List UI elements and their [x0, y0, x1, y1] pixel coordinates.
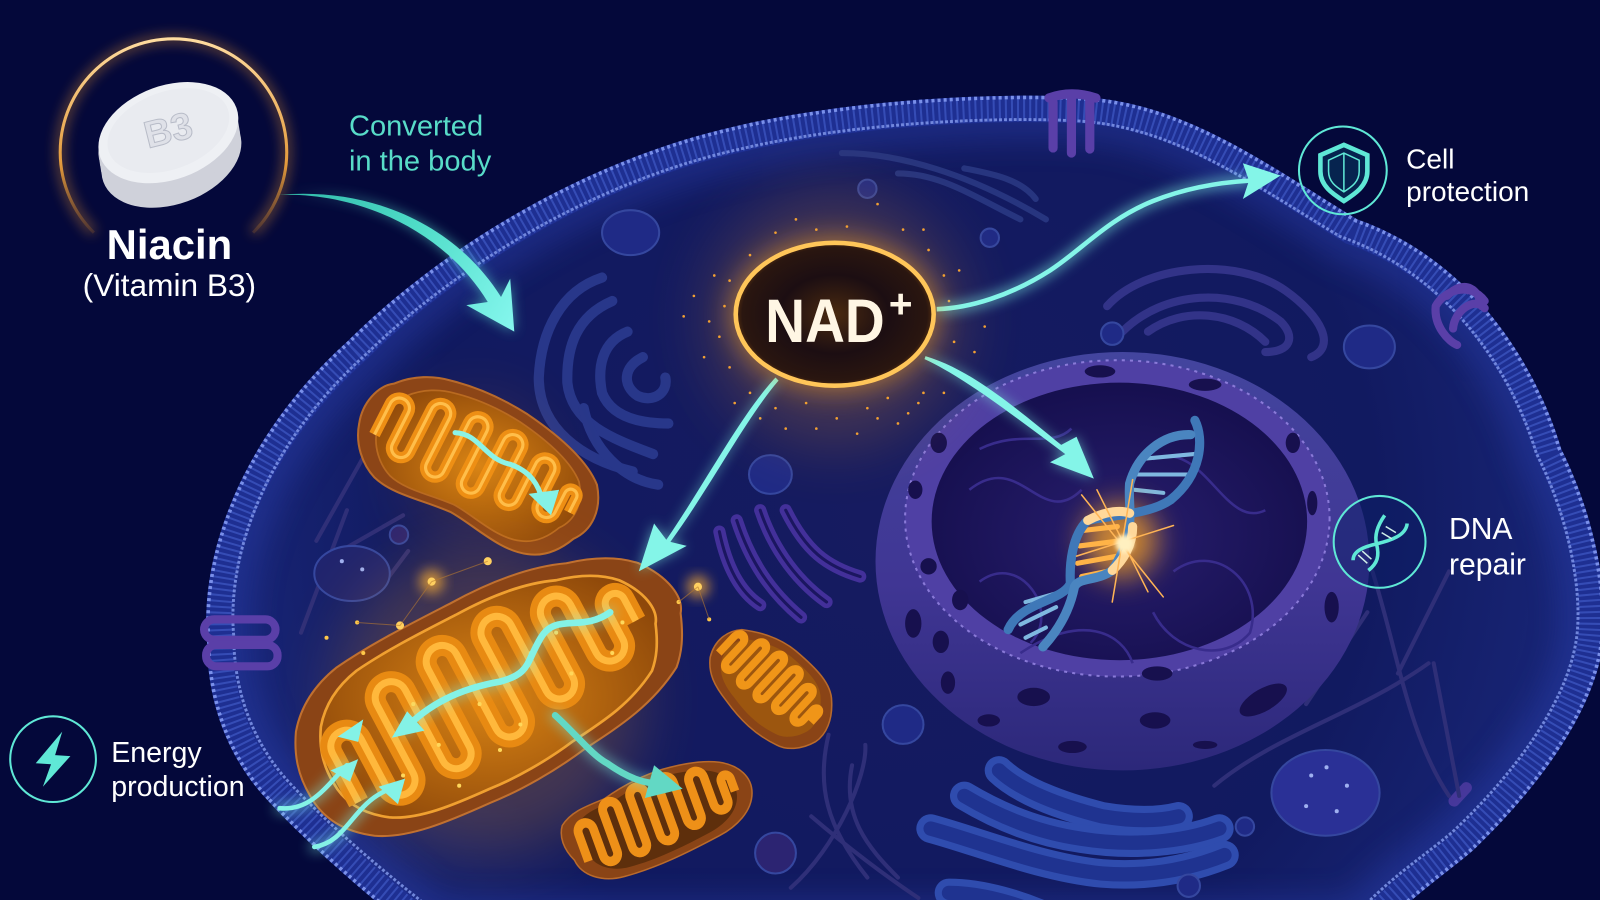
icon: cell protection shield [1299, 127, 1387, 214]
converted label: Converted [349, 111, 483, 143]
NAD+ superscript: + [889, 280, 913, 326]
B3 tablet [84, 64, 256, 226]
icon: DNA repair [1334, 496, 1426, 588]
glowing ring [60, 39, 287, 233]
arrow: NAD+ to DNA [924, 356, 1094, 479]
arrow: lower inflow two [314, 791, 386, 847]
endoplasmic reticulum: top [842, 153, 1046, 219]
mitochondrion: bottom [561, 756, 752, 879]
label: energy production: production [111, 771, 245, 803]
vesicle highlights [342, 561, 1347, 811]
arrow: niacin to cell [279, 194, 514, 332]
arrowheads inside mitochondria [331, 490, 683, 804]
vesicles [314, 180, 1395, 897]
cell body and membrane [206, 96, 1600, 900]
nucleus [876, 352, 1369, 770]
arrow: large mitochondrion flow [403, 612, 610, 731]
nuclear chromatin [969, 429, 1265, 663]
label: cell protection: Cell [1406, 143, 1454, 174]
niacin pill with ring [60, 39, 287, 233]
icon: energy bolt [10, 716, 96, 802]
mitochondrion: large [295, 546, 682, 852]
niacin subtitle: (Vitamin B3) [83, 267, 256, 303]
energy sparks [327, 561, 709, 653]
golgi: upper right [1107, 269, 1324, 357]
label: cell protection: protection [1406, 176, 1529, 207]
NAD+ glow dust [684, 191, 985, 446]
filaments [301, 459, 1459, 898]
converted label: in the body [349, 145, 492, 177]
label: energy production: Energy [111, 737, 202, 769]
arrows inside mitochondria [280, 433, 661, 847]
label: DNA repair: DNA [1449, 513, 1513, 546]
helix rungs [1020, 434, 1194, 638]
mitochondrion: top [358, 377, 598, 555]
golgi: purple middle [719, 510, 860, 617]
protein: right [1436, 287, 1485, 345]
arrow: lower inflow one [280, 765, 347, 808]
arrow: mitochondrion to lower mitochondrion [555, 715, 661, 784]
label: DNA repair: repair [1449, 548, 1526, 581]
protein: top [1049, 94, 1096, 153]
protein: lower right [1454, 788, 1466, 801]
organelles in cytoplasm [301, 153, 1459, 900]
NAD+ badge [733, 240, 937, 389]
repair glow [1084, 504, 1157, 578]
repair spark [1077, 480, 1173, 602]
mitochondrial sparkle [403, 622, 622, 786]
arrow: NAD+ to cell protection [937, 163, 1281, 309]
mitochondrion: small right [710, 623, 832, 748]
nuclear pores [905, 365, 1339, 753]
protein: left [204, 619, 278, 666]
arrow: NAD+ to mitochondrion [639, 378, 779, 571]
niacin title: Niacin [107, 221, 232, 268]
golgi: bottom [931, 770, 1224, 900]
arrow: top mitochondrion [455, 433, 543, 502]
DNA helix [1008, 420, 1200, 647]
NAD+ label: NAD [765, 287, 885, 356]
tablet imprint: B3 [140, 104, 197, 156]
membrane proteins [204, 94, 1485, 801]
golgi: upper left [539, 278, 668, 485]
